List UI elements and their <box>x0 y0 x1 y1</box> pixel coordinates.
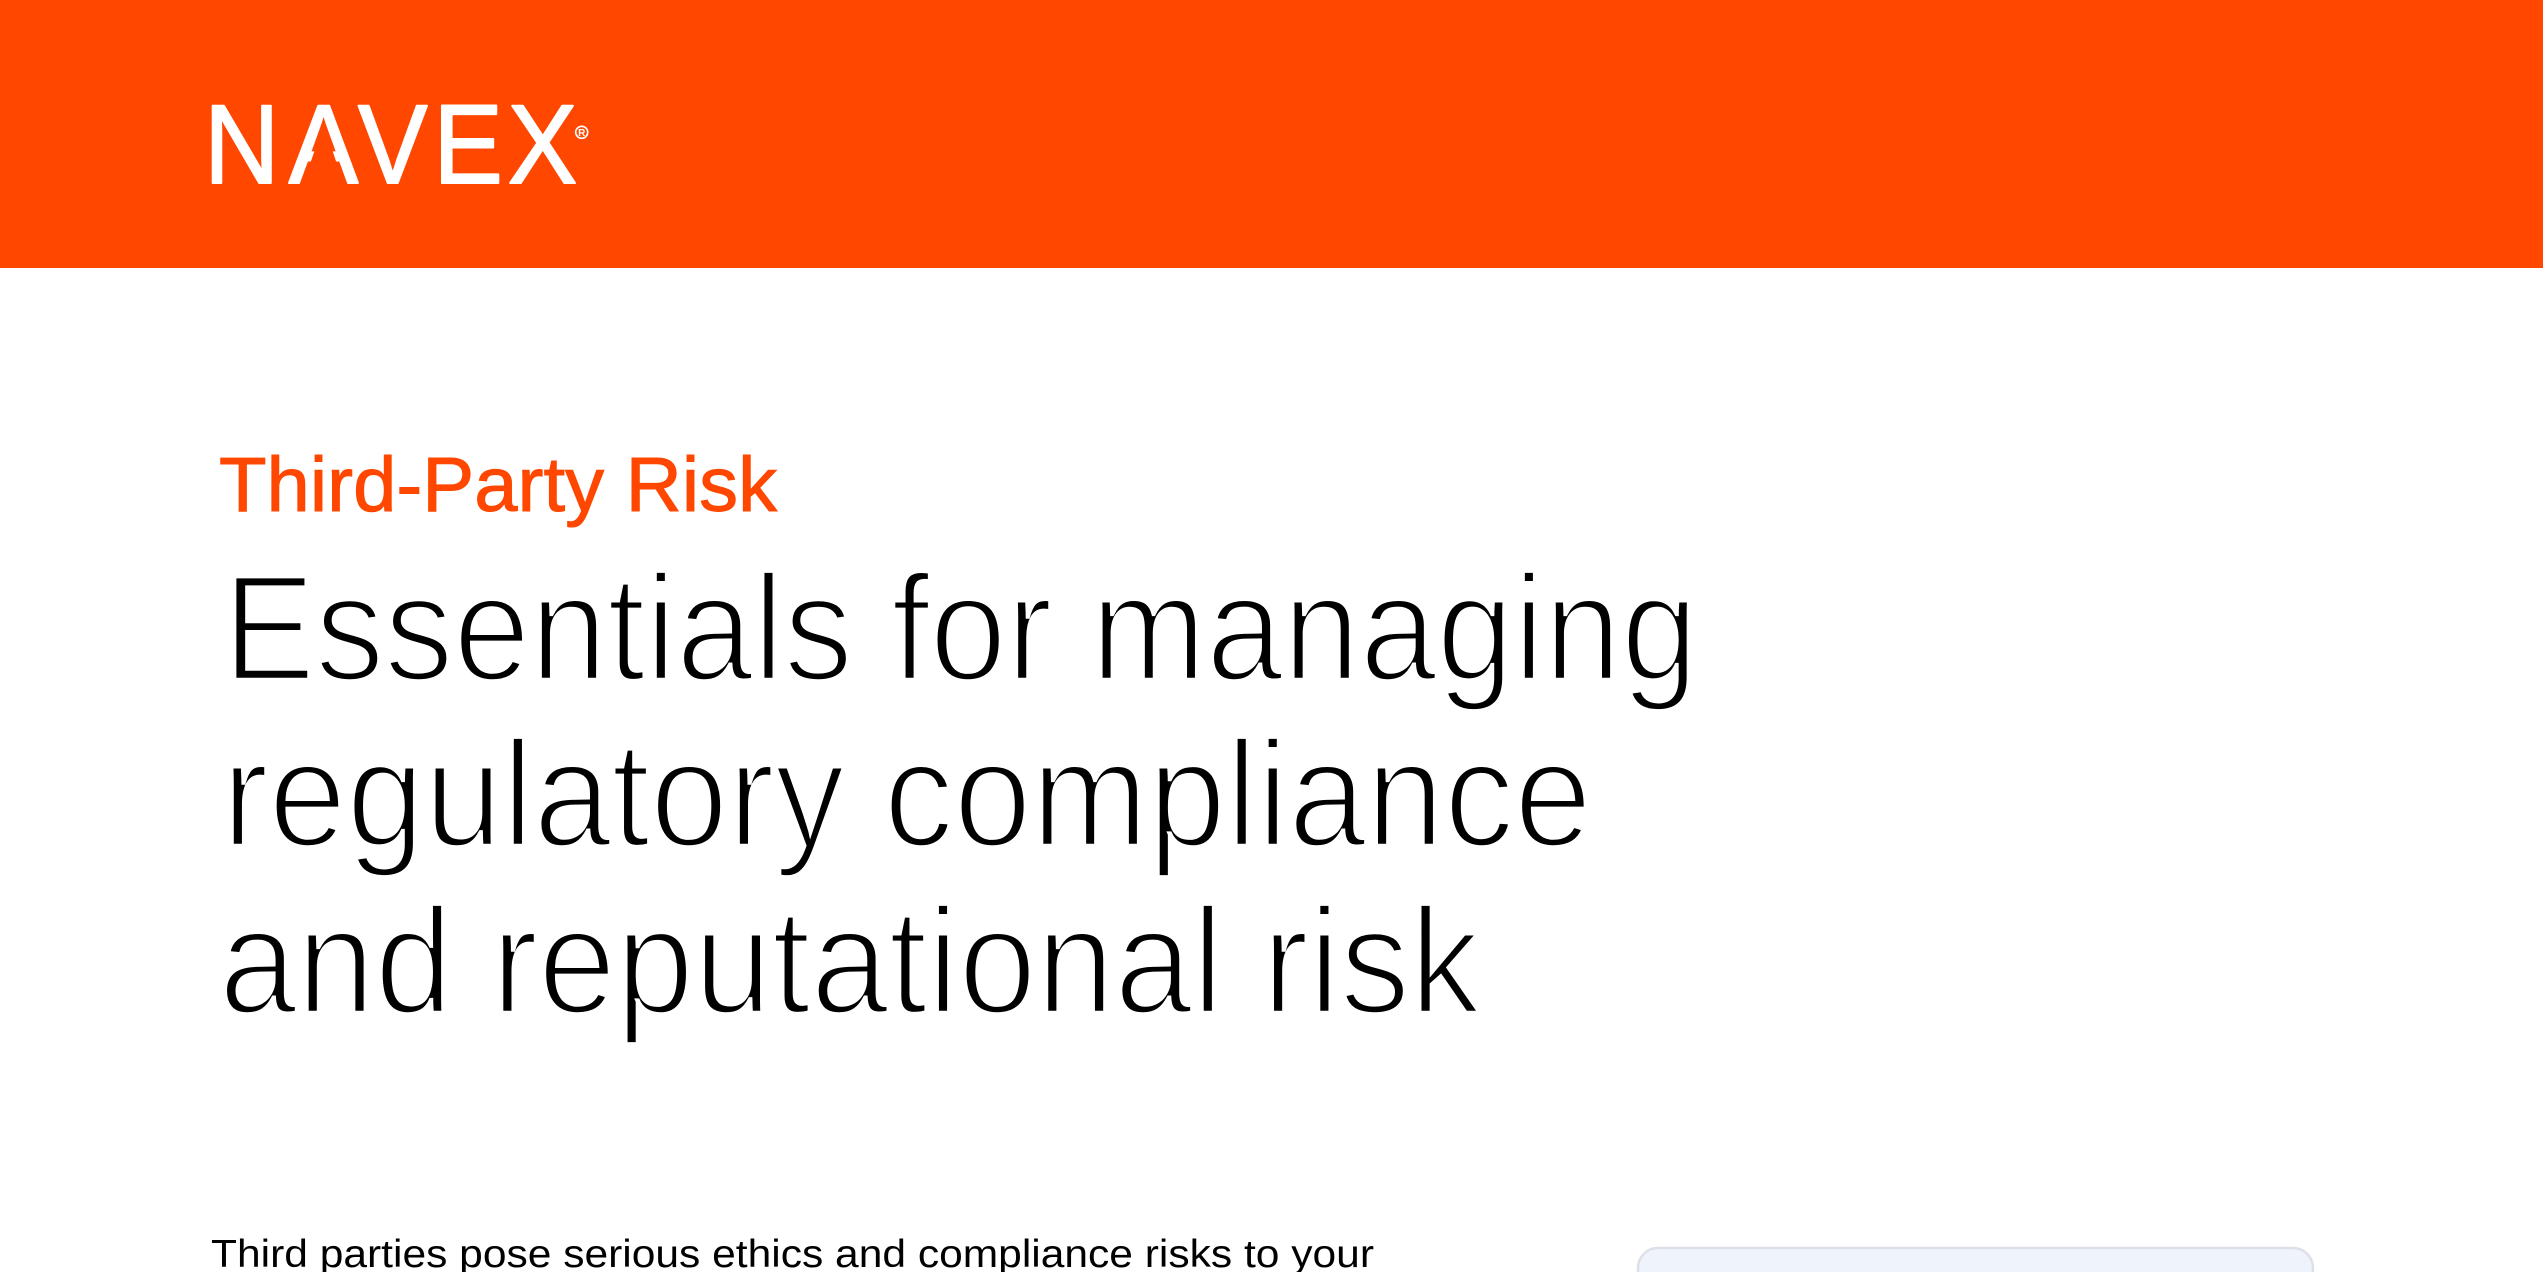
logo: NAVEX: NAVEX <box>204 82 577 207</box>
main title: and reputational risk <box>219 876 1480 1045</box>
main title: Essentials for managing <box>223 543 1698 712</box>
panel: sidebar card <box>1638 1248 2313 1272</box>
logo: registered mark <box>576 126 588 139</box>
logo: registered mark: R <box>578 128 586 139</box>
header band <box>0 0 2543 268</box>
eyebrow heading: Third-Party Risk <box>219 442 777 528</box>
main title <box>219 543 1698 1045</box>
main title: regulatory compliance <box>222 709 1592 878</box>
